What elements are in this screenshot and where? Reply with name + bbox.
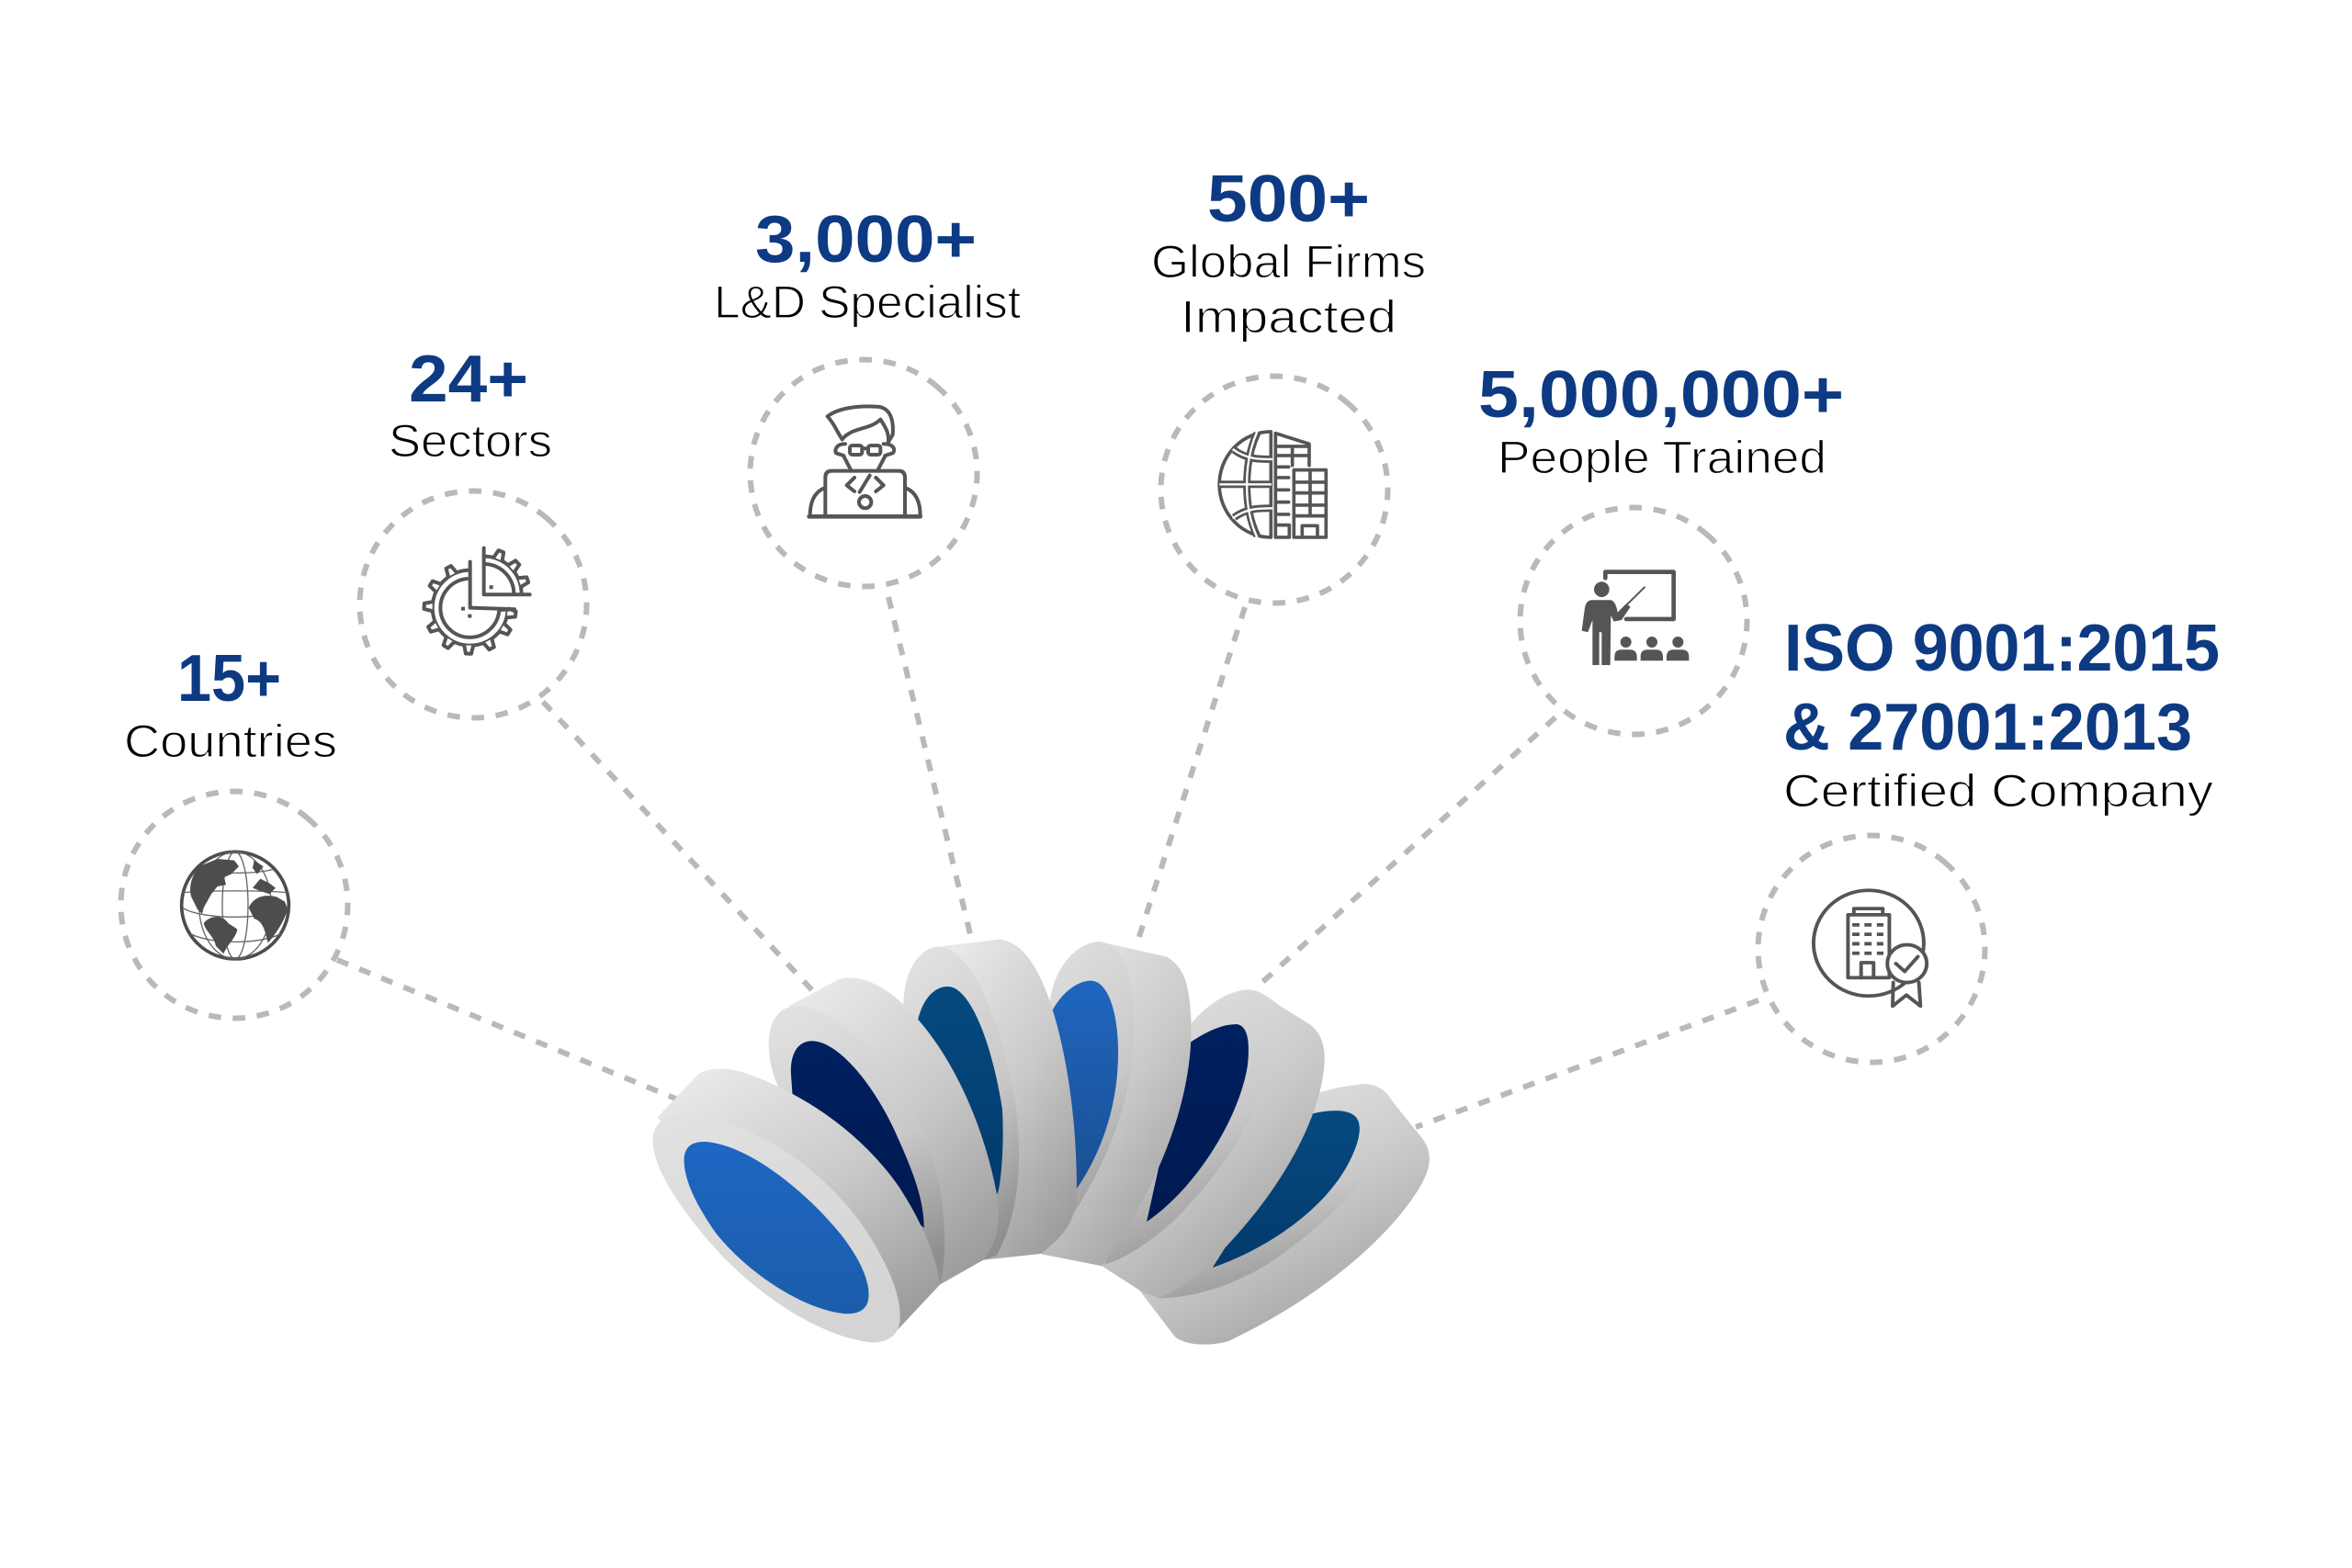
heading: ISO 9001:2015 & 27001:2013: & 27001:2013	[1783, 691, 2192, 764]
icon: gear pie chart	[424, 548, 530, 654]
stat: 5,000,000+ People Trained	[1474, 358, 1844, 781]
disc 5: navy	[1102, 989, 1325, 1298]
stat: 3,000+ L&D Specialist	[704, 203, 1023, 633]
stat: 15+ Countries	[74, 642, 394, 1065]
dashed ring	[74, 745, 394, 1065]
central graphic: fan of six 3D discs	[653, 940, 1430, 1345]
label: Global Firms Impacted: Global Firms	[1151, 236, 1426, 288]
icon: certified building	[1814, 890, 1927, 1006]
connector: 500+ firms to graphic	[1136, 607, 1245, 948]
heading: 5,000,000+: 5,000,000+	[1478, 358, 1844, 432]
connector: ISO certification to graphic	[1416, 1000, 1758, 1127]
heading: 15+: 15+	[177, 642, 281, 716]
connector: 5,000,000+ people to graphic	[1261, 717, 1555, 984]
heading: 3,000+: 3,000+	[755, 203, 977, 276]
icon: globe	[182, 852, 288, 959]
icon: developer at laptop	[809, 406, 921, 516]
dashed ring	[704, 313, 1023, 633]
connector: 15+ Countries to graphic	[337, 960, 678, 1100]
dashed ring	[313, 445, 633, 764]
label: Global Firms Impacted: Impacted	[1181, 291, 1396, 343]
disc 3: teal	[903, 940, 1077, 1260]
dashed ring	[1114, 330, 1434, 649]
label: Sectors: Sectors	[389, 415, 552, 467]
label: L&D Specialist: L&D Specialist	[714, 276, 1021, 328]
disc 1: bright blue, front	[653, 1069, 940, 1342]
heading: ISO 9001:2015 & 27001:2013: ISO 9001:2015	[1784, 612, 2220, 685]
connector: 3,000+ specialists to graphic	[888, 597, 972, 942]
dashed ring	[1712, 789, 2031, 1109]
disc 4: bright blue	[1013, 942, 1192, 1266]
heading: 500+: 500+	[1207, 163, 1370, 236]
disc 2: navy	[769, 977, 999, 1284]
icon: trainer at whiteboard with audience	[1582, 572, 1689, 665]
label: Countries: Countries	[124, 716, 337, 767]
stat: 500+ Global Firms Impacted	[1114, 163, 1434, 649]
stat: 24+ Sectors	[313, 343, 633, 764]
icon: globe and office buildings	[1219, 432, 1326, 537]
label: People Trained: People Trained	[1498, 432, 1826, 483]
label: Certified Company: Certified Company	[1783, 765, 2213, 817]
connector: 24+ Sectors to graphic	[543, 702, 812, 990]
stat: ISO certified company	[1712, 612, 2220, 1109]
heading: 24+: 24+	[409, 343, 528, 416]
disc 6: teal	[1139, 1084, 1430, 1345]
dashed ring	[1474, 461, 1793, 781]
